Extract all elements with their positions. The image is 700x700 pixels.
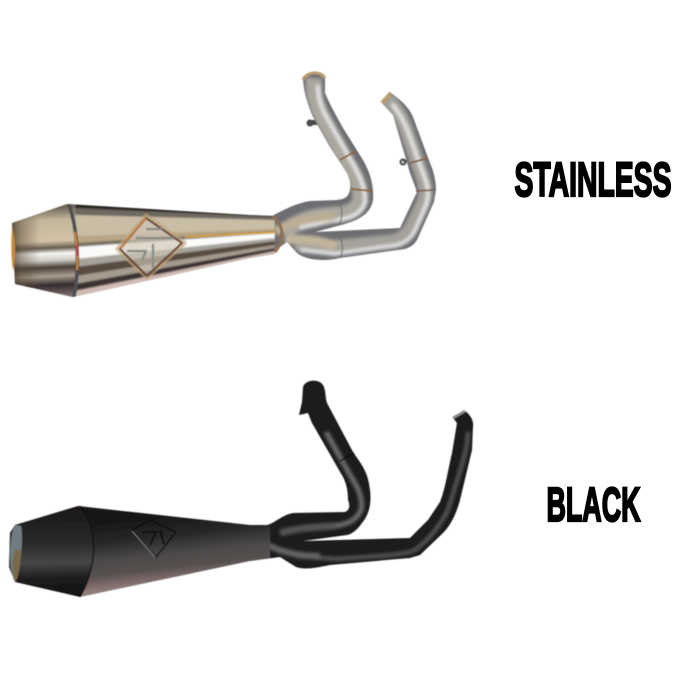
muffler black <box>8 505 271 598</box>
infographic canvas <box>8 70 672 598</box>
diamond logo black <box>132 520 176 557</box>
pipe welds stainless <box>303 73 434 258</box>
collector weld <box>273 216 282 252</box>
weld band <box>69 204 77 297</box>
black exhaust <box>0 370 485 600</box>
mounting tabs stainless <box>306 120 412 166</box>
header pipes and collector black <box>250 380 474 570</box>
tailpipe opening black <box>10 525 22 582</box>
header pipes and collector stainless <box>272 74 437 261</box>
exhaust tip black <box>453 411 465 418</box>
stainless exhaust <box>0 60 445 300</box>
muffler stainless <box>11 203 276 298</box>
pipe welds black <box>340 453 354 461</box>
tailpipe opening stainless <box>11 228 15 270</box>
diamond logo stainless <box>118 216 184 277</box>
